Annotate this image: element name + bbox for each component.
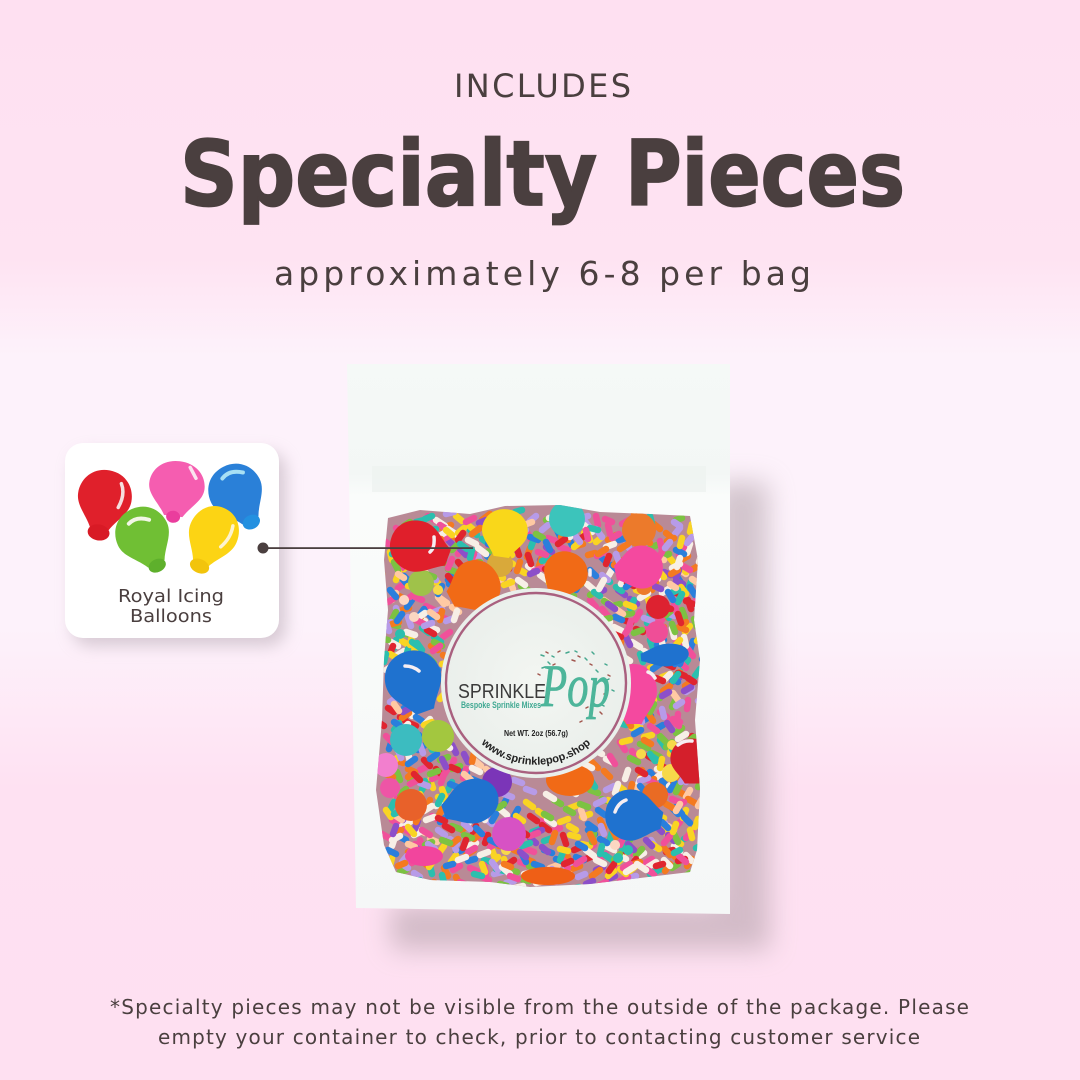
label line 1: Royal Icing: [118, 586, 224, 607]
icon: yellow balloon: [174, 498, 247, 582]
logo: sprinkle: SPRINKLE: [458, 681, 546, 703]
bag shadow: [390, 482, 770, 950]
sprinkle base: [370, 500, 705, 892]
title: [180, 122, 905, 227]
round label: [441, 588, 631, 778]
balloon orange middle: [544, 551, 588, 594]
card label: [118, 586, 224, 627]
confetti: [538, 651, 614, 722]
sprinkle mix: [370, 500, 714, 894]
balloon pink right: [624, 664, 657, 724]
icon: green balloon: [107, 498, 184, 583]
callout card: royal icing balloons: [65, 443, 279, 638]
card shadow: [72, 452, 286, 646]
sprinkles layer 4: [378, 528, 686, 894]
orange piece under label: [546, 764, 594, 796]
sprinkles layer 2: [400, 523, 708, 889]
icon: blue balloon: [199, 455, 279, 541]
pointer dot: [258, 542, 268, 554]
footnote line 1: *Specialty pieces may not be visible from the outside of the package. Please: [110, 995, 969, 1019]
balloon red: [390, 520, 451, 572]
title word 2: Pieces: [625, 122, 905, 227]
pointer line: [258, 542, 473, 554]
sprinkles layer 3: [386, 510, 694, 876]
pink bottom piece: [405, 846, 443, 866]
bag body: [347, 364, 730, 914]
nonpareils: [400, 590, 672, 858]
heading: includes: INCLUDES: [454, 67, 631, 105]
label disc: [441, 588, 631, 778]
subtitle: approximately 6-8 per bag: [274, 254, 811, 293]
logo: pop: Pop: [540, 653, 610, 719]
logo tagline: Bespoke Sprinkle Mixes: [461, 700, 541, 710]
pointer stroke: [263, 547, 473, 549]
footnote line 2: empty your container to check, prior to contacting customer service: [158, 1025, 920, 1049]
footnote: [110, 995, 969, 1049]
card background: [65, 443, 279, 638]
sprinkles: [388, 514, 696, 880]
balloon highlights: [405, 537, 692, 812]
icon: pink balloon: [145, 458, 208, 526]
label ring: [446, 593, 626, 773]
balloon yellow: [482, 509, 528, 558]
balloon blue lower right: [605, 790, 664, 841]
product bag: [348, 366, 730, 914]
balloon orange left: [446, 560, 501, 610]
title word 1: Specialty: [180, 122, 597, 227]
balloon red right: [670, 738, 700, 784]
balloon blue right: [640, 644, 689, 666]
website: www.sprinklepop.shop: [482, 739, 590, 766]
bag zipper: [372, 466, 706, 492]
spheres: [374, 501, 680, 851]
bag balloons: [377, 506, 714, 885]
balloon pink: [614, 546, 663, 589]
net weight: Net WT. 2oz (56.7g): [504, 728, 568, 738]
balloon blue lower left: [441, 778, 498, 824]
balloon blue left: [384, 650, 442, 714]
icon: red balloon: [71, 466, 136, 545]
label line 2: Balloons: [130, 606, 212, 627]
orange bottom piece: [521, 867, 575, 885]
